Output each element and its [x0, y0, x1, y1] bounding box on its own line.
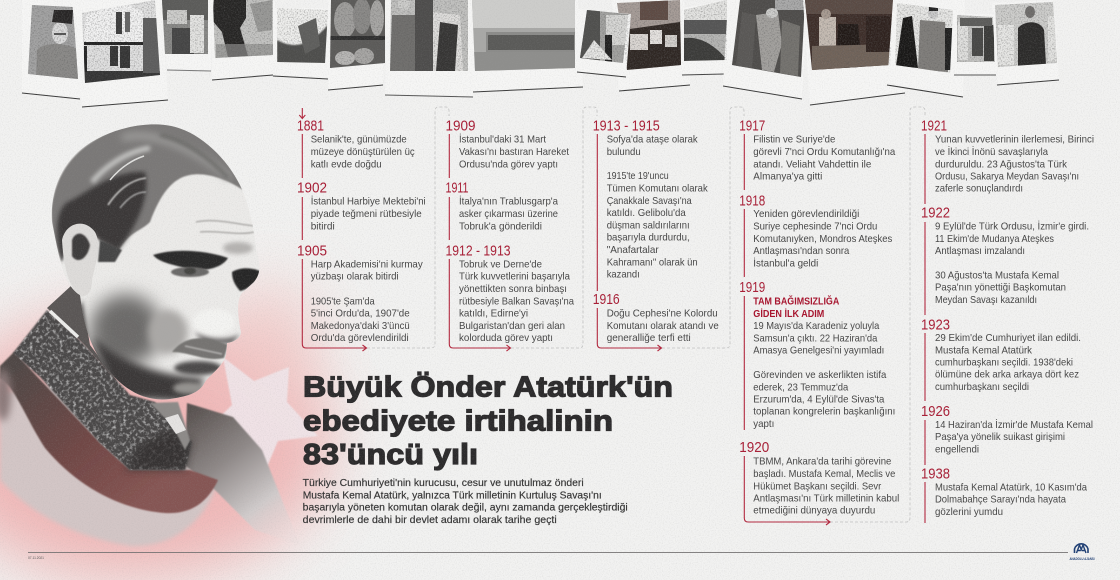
entry 1913-1915: kazandı [607, 269, 640, 280]
entry 1921: zaferle sonuçlandırdı [935, 184, 1023, 195]
entry 1919: toplanan kongrelerin başkanlığını [753, 407, 895, 418]
highlighted subheading [753, 294, 839, 320]
polaroid 12: walking officers [723, 0, 808, 99]
entry 1913-1915: 1915'te 19'uncu [607, 171, 669, 182]
entry 1905: Makedonya'daki 3'üncü [311, 321, 410, 332]
footer line [28, 551, 1068, 553]
entry 1923 [921, 316, 1081, 393]
entry 1917: Filistin ve Suriye'de [753, 135, 836, 146]
entry 1917: görevli 7'nci Ordu Komutanlığı'na [753, 147, 896, 158]
entry 1920 [739, 439, 899, 517]
entry 1922: 1922 [921, 204, 950, 221]
nose [196, 312, 232, 332]
photo surface texture [28, 0, 1057, 82]
entry 1916: Doğu Cephesi'ne Kolordu [607, 309, 718, 320]
head [52, 124, 259, 399]
entry 1912-1913: Bulgaristan'dan geri alan [459, 321, 565, 332]
entry 1926: 14 Haziran'da İzmir'de Mustafa Kemal [935, 418, 1093, 431]
red timeline line [597, 134, 662, 351]
entry 1926: 1926 [921, 403, 950, 420]
moustache [172, 338, 228, 359]
ear [62, 224, 98, 296]
polaroid 9: interior [575, 9, 631, 77]
entry 1923: 1923 [921, 316, 950, 333]
entry 1881: Selanik'te, günümüzde [311, 135, 407, 146]
entry 1913-1915 [593, 118, 709, 280]
entry 1912-1913: kolorduda görev yaptı [459, 333, 553, 344]
shirt collar [50, 311, 78, 337]
entry 1909: 1909 [446, 118, 476, 135]
entry 1905: yüzbaşı olarak bitirdi [311, 272, 399, 283]
date: 07.11.2021 [28, 555, 45, 560]
polaroid 11: crowd [682, 0, 729, 75]
entry 1881 [297, 118, 415, 170]
entry 1902: İstanbul Harbiye Mektebi'ni [311, 195, 426, 208]
polaroid 14: Atatürk in coat [887, 0, 965, 97]
entry 1938 [921, 465, 1087, 518]
red timeline line [744, 134, 830, 525]
entry 1911: asker çıkarması üzerine [459, 209, 558, 220]
intro paragraph: Mustafa Kemal Atatürk, yalnızca Türk milletinin Kurtuluş Savaşı'nı [303, 490, 602, 501]
logo: Anadolu Ajansı [1070, 544, 1094, 561]
entry 1918: 1918 [739, 192, 765, 209]
entry 1938: Mustafa Kemal Atatürk, 10 Kasım'da [935, 482, 1087, 493]
entry 1905: Harp Akademisi'ni kurmay [311, 259, 424, 270]
polaroid 16: Atatürk on the field [992, 0, 1059, 85]
coat left side [0, 352, 218, 513]
polaroid 3: classroom [160, 0, 211, 71]
entry 1919: Görevinden ve askerlikten istifa [753, 370, 887, 381]
entry 1920: başladı. Mustafa Kemal, Meclis ve [753, 469, 896, 480]
entry 1902: 1902 [297, 180, 327, 197]
entry 1923: 29 Ekim'de Cumhuriyet ilan edildi. [935, 333, 1081, 344]
entry 1916: Komutanı olarak atandı ve [607, 321, 719, 332]
entry 1911: İtalya'nın Trablusgarp'a [459, 195, 558, 208]
entry 1920: Hükümet Başkanı seçildi. Sevr [753, 481, 882, 492]
entry 1918: Yeniden görevlendirildiği [753, 209, 859, 220]
top photo strip [0, 0, 1120, 107]
entry 1911: 1911 [446, 180, 468, 197]
entry 1909: İstanbul'daki 31 Mart [459, 133, 546, 146]
entry 1909 [446, 118, 569, 170]
red timeline line [302, 134, 366, 351]
entry 1921: ve İkinci İnönü savaşlarıyla [935, 145, 1048, 158]
entry 1923: Mustafa Kemal Atatürk [935, 345, 1033, 356]
left brow and eye [153, 251, 228, 270]
entry 1913-1915: 1913 - 1915 [593, 118, 660, 135]
entry 1913-1915: Tümen Komutanı olarak [607, 184, 709, 195]
polaroid 6: group of soldiers [328, 0, 387, 90]
entry 1912-1913: 1912 - 1913 [446, 242, 510, 259]
entry 1912-1913 [446, 242, 574, 344]
title [303, 371, 673, 471]
coat right side [185, 403, 300, 545]
entry 1938: gözlerini yumdu [935, 507, 1003, 518]
entry 1905: Ordu'da görevlendirildi [311, 333, 409, 344]
entry 1917: Almanya'ya gitti [753, 171, 822, 182]
entry 1913-1915: Çanakkale Savaşı'na [607, 196, 692, 207]
entry 1921: Ordusu, Sakarya Meydan Savaşı'nı [935, 171, 1079, 182]
dashed timeline connectors [367, 107, 925, 522]
entry 1922: 9 Eylül'de Türk Ordusu, İzmir'e girdi. [935, 220, 1089, 233]
entry 1917: 1917 [739, 118, 765, 135]
entry 1918: Suriye cephesinde 7'nci Ordu [753, 222, 877, 233]
polaroid 1: portrait in fez [22, 0, 84, 99]
polaroid 10: congress group [612, 0, 690, 91]
flag star [200, 357, 318, 488]
polaroid 15: group outdoors [954, 14, 996, 75]
entry 1922: Antlaşması imzalandı [935, 246, 1025, 257]
entry 1905 [297, 242, 424, 344]
timeline column 5 [921, 118, 1094, 523]
polaroid 5: trench [273, 18, 328, 80]
entry 1919: Erzurum'da, 4 Eylül'de Sivas'ta [753, 394, 885, 405]
polaroid 4: standing figure [211, 0, 275, 80]
highlighted subheading: TAM BAĞIMSIZLIĞA [753, 294, 839, 308]
logo: Anadolu Ajansı: ANADOLU AJANSI [1070, 556, 1094, 561]
entry 1912-1913: Türk kuvvetlerini başarıyla [459, 272, 570, 283]
entry 1881: müzeye dönüştürülen üç [311, 147, 415, 158]
entry 1923: ölümüne dek arka arkaya dört kez [935, 370, 1079, 381]
hair [52, 123, 243, 262]
entry 1902 [297, 180, 426, 232]
entry 1881: 1881 [297, 118, 324, 135]
entry 1913-1915: düşman saldırılarını [607, 220, 690, 231]
entry 1926 [921, 403, 1093, 455]
portrait of Atatürk [0, 123, 300, 545]
entry 1938: Dolmabahçe Sarayı'nda hayata [935, 495, 1066, 506]
intro paragraph: başarıyla yöneten komutan olarak değil, aynı zamanda gerçekleştirdiği [303, 503, 628, 514]
start arrow [299, 108, 305, 118]
neck [47, 285, 120, 385]
entry 1919: 1919 [739, 279, 765, 296]
entry 1923: cumhurbaşkanı seçildi. 1938'deki [935, 357, 1073, 368]
entry 1902: bitirdi [311, 221, 335, 232]
highlighted subheading: GİDEN İLK ADIM [753, 307, 824, 320]
polaroid 7: two officers [385, 0, 473, 97]
entry 1905: 5'inci Ordu'da, 1907'de [311, 309, 410, 320]
timeline column 2 [446, 118, 574, 351]
entry 1921: 1921 [921, 118, 947, 135]
entry 1916: 1916 [593, 291, 620, 308]
entry 1913-1915: "Anafartalar [607, 245, 659, 256]
timeline column 4 [739, 118, 899, 525]
title: 83'üncü yılı [303, 439, 478, 471]
forehead wrinkles [196, 221, 255, 233]
entry 1922 [921, 204, 1089, 306]
right brow and eye [232, 268, 262, 291]
entry 1920: TBMM, Ankara'da tarihi görevine [753, 457, 892, 468]
entry 1918 [739, 192, 892, 269]
entry 1917: atandı. Veliaht Vahdettin ile [753, 159, 872, 170]
red timeline line [449, 134, 510, 351]
entry 1913-1915: bulundu [607, 147, 641, 158]
entry 1911: Tobruk'a gönderildi [459, 221, 542, 232]
entry 1905: 1905'te Şam'da [311, 296, 375, 307]
entry 1920: 1920 [739, 439, 769, 456]
entry 1921 [921, 118, 1094, 195]
intro paragraph: devrimlerle de dahi bir devlet adamı olarak tarihe geçti [303, 515, 557, 526]
entry 1922: Meydan Savaşı kazanıldı [935, 295, 1037, 306]
entry 1881: katlı evde doğdu [311, 159, 382, 170]
entry 1920: etmediğini dünyaya duyurdu [753, 506, 875, 517]
polaroid 13: officers group [803, 0, 905, 105]
entry 1922: 30 Ağustos'ta Mustafa Kemal [935, 270, 1059, 281]
timeline column 3 [593, 118, 719, 351]
entry 1921: Yunan kuvvetlerinin ilerlemesi, Birinci [935, 135, 1094, 146]
entry 1918: İstanbul'a geldi [753, 256, 818, 269]
entry 1926: engellendi [935, 444, 979, 455]
entry 1909: Ordusu'nda görev yaptı [459, 159, 558, 170]
entry 1913-1915: katıldı. Gelibolu'da [607, 208, 686, 219]
entry 1918: Antlaşması'ndan sonra [753, 246, 850, 257]
entry 1911 [446, 180, 558, 232]
entry 1916: generalliğe terfi etti [607, 333, 691, 344]
polaroid 2: birth house [72, 0, 168, 107]
entry 1919: ederek, 23 Temmuz'da [753, 382, 849, 393]
entry 1913-1915: başarıyla durdurdu, [607, 233, 690, 244]
flag crescent band [0, 386, 216, 546]
entry 1916 [593, 291, 719, 344]
entry 1923: cumhurbaşkanı seçildi [935, 382, 1029, 393]
entry 1938: 1938 [921, 465, 950, 482]
entry 1919: yaptı [753, 419, 774, 430]
entry 1922: Paşa'nın yönettiği Başkomutan [935, 283, 1066, 294]
entry 1919 [739, 279, 895, 430]
mouth shadow [174, 361, 222, 375]
polaroid 8: Anıtkabir [470, 0, 583, 92]
entry 1909: Vakası'nı bastıran Hareket [459, 147, 569, 158]
entry 1913-1915: Kahramanı" olarak ün [607, 257, 698, 268]
entry 1913-1915: Sofya'da ataşe olarak [607, 135, 699, 146]
title: ebediyete irtihalinin [303, 406, 613, 438]
entry 1919: Amasya Genelgesi'ni yayımladı [753, 345, 884, 356]
entry 1917 [739, 118, 896, 182]
fur collar [12, 310, 194, 474]
timeline column 1 [297, 108, 426, 351]
title: Büyük Önder Atatürk'ün [303, 371, 673, 404]
entry 1919: 19 Mayıs'da Karadeniz yoluyla [753, 321, 880, 332]
intro paragraph [303, 478, 628, 526]
entry 1926: Paşa'ya yönelik suikast girişimi [935, 432, 1065, 443]
entry 1920: Antlaşması'nı Türk milletinin kabul [753, 494, 899, 505]
entry 1919: Samsun'a çıktı. 22 Haziran'da [753, 333, 878, 344]
entry 1912-1913: Tobruk ve Derne'de [459, 259, 542, 270]
intro paragraph: Türkiye Cumhuriyeti'nin kurucusu, cesur ve unutulmaz önderi [303, 478, 584, 489]
entry 1912-1913: katıldı, Edirne'yi [459, 309, 528, 320]
entry 1912-1913: yönettikten sonra binbaşı [459, 284, 567, 295]
entry 1921: durduruldu. 23 Ağustos'ta Türk [935, 159, 1068, 170]
entry 1912-1913: rütbesiyle Balkan Savaşı'na [459, 296, 574, 307]
entry 1918: Komutanıyken, Mondros Ateşkes [753, 234, 892, 245]
cheek shadow [90, 294, 162, 366]
entry 1905: 1905 [297, 242, 327, 259]
red timeline line [924, 134, 926, 523]
entry 1922: 11 Ekim'de Mudanya Ateşkes [935, 234, 1054, 245]
entry 1902: piyade teğmeni rütbesiyle [311, 209, 422, 220]
